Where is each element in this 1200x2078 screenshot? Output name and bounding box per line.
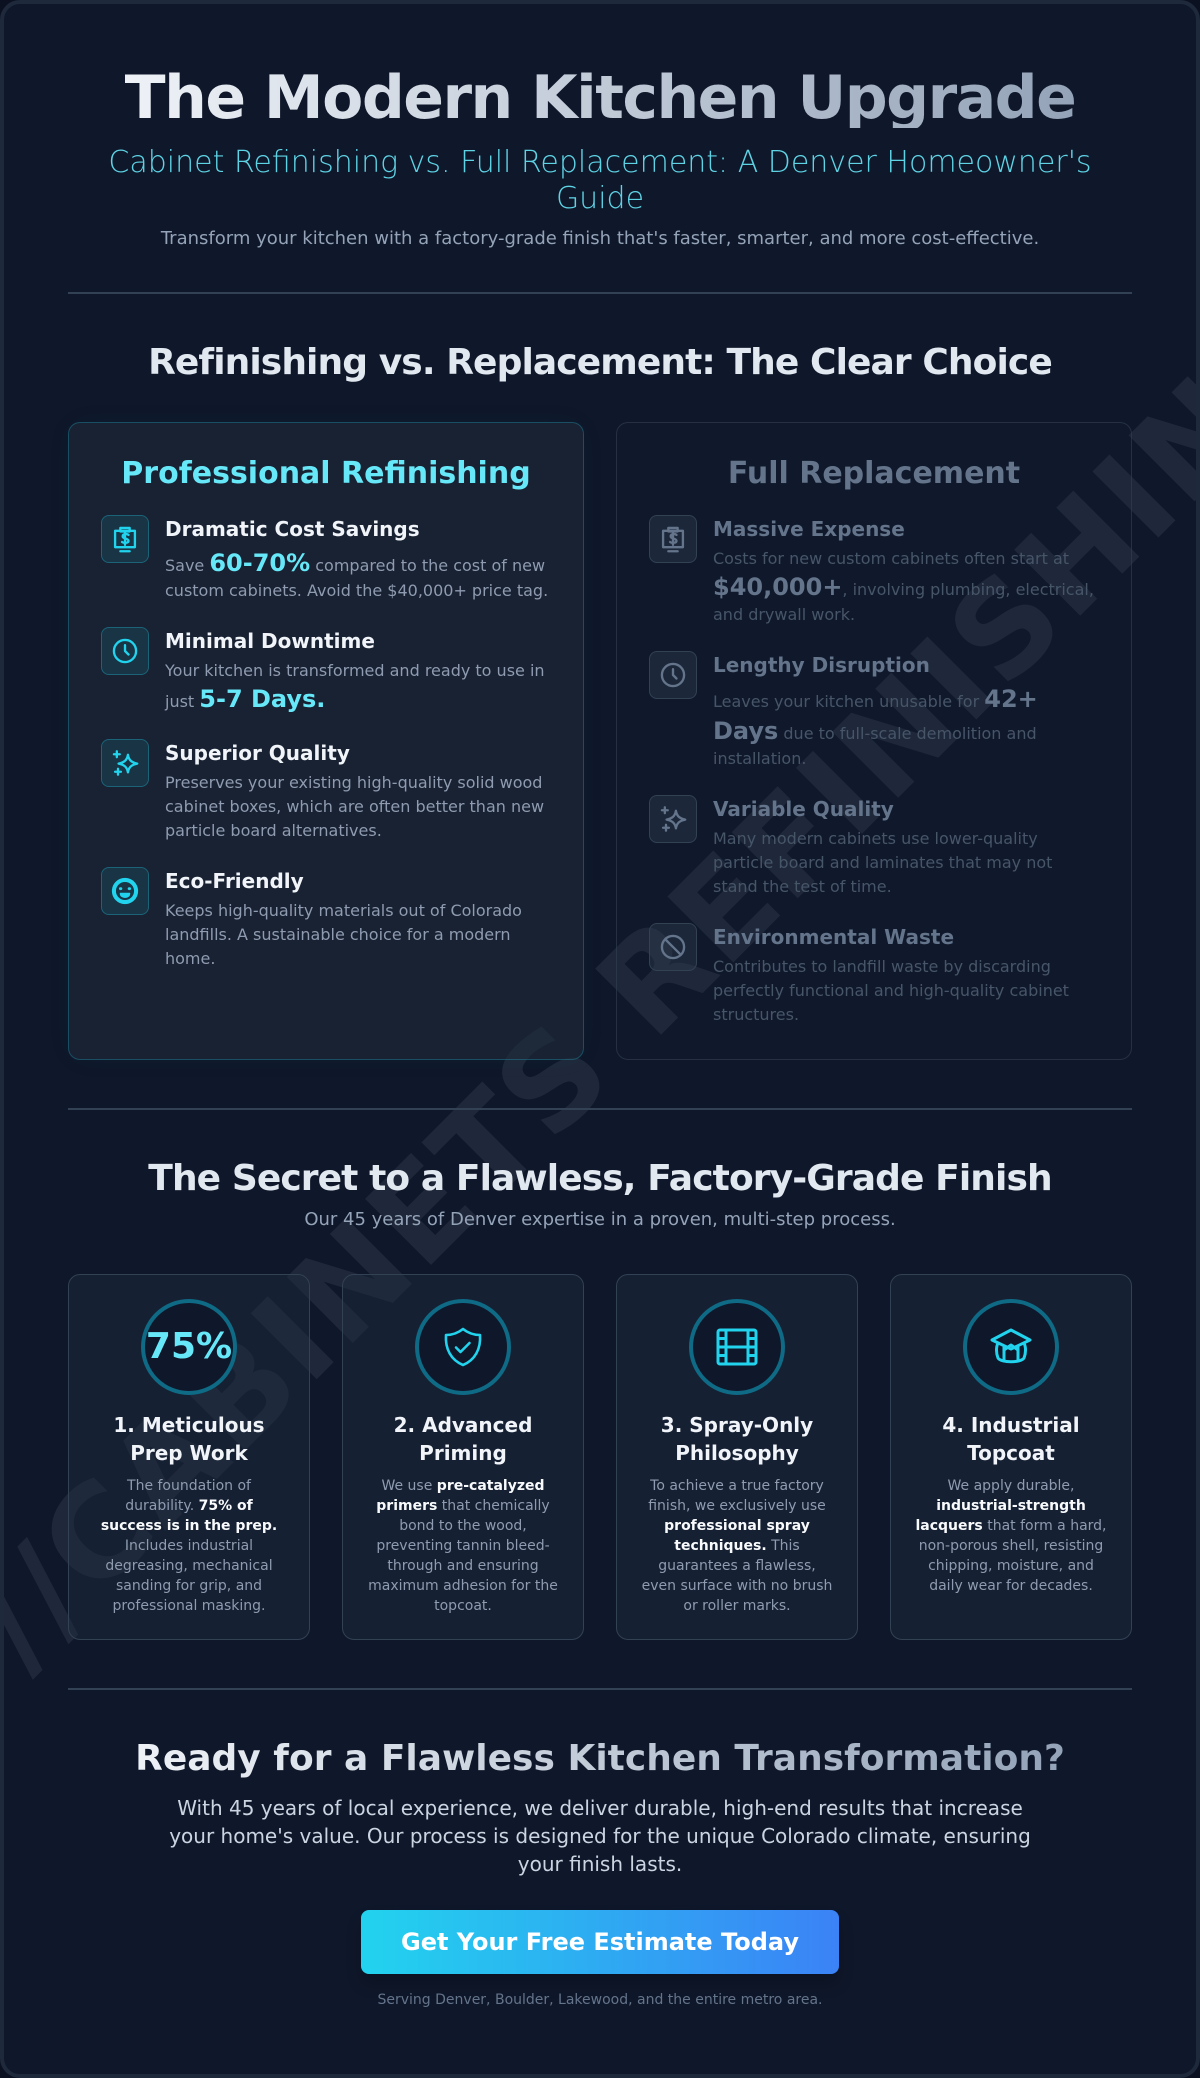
item text: Keeps high-quality materials out of Colorado landfills. A sustainable choice for a modern home. [165,901,522,968]
cta text: With 45 years of local experience, we deliver durable, high-end results that increase your home's value. Our process is designed for the unique Colorado climate, ensuring your finish lasts. [169,1796,1031,1876]
item text [713,797,1052,896]
icon: prohibited [649,923,697,971]
cta button [361,1910,839,1974]
comparison columns [68,422,1132,1060]
item: variable quality [649,795,1052,896]
comparison heading: Refinishing vs. Replacement: The Clear Choice [148,342,1052,383]
stat: 75%: 75% [146,1326,232,1367]
step 4 card [890,1274,1132,1640]
process heading: The Secret to a Flawless, Factory-Grade Finish [148,1158,1052,1199]
header [108,63,1092,249]
icon: clipboard dollar [101,515,149,563]
panel heading: Full Replacement [728,456,1020,491]
item text [713,925,1069,1024]
step title: 4. Industrial Topcoat [942,1413,1080,1465]
item text: Superior Quality [165,741,350,765]
step text: The foundation of durability. 75% of success is in the prep. Includes industrial degreasing, mechanical sanding for grip, and professional masking. [101,1478,277,1614]
icon: film strip [689,1299,785,1395]
subtitle: Cabinet Refinishing vs. Full Replacement: A Denver Homeowner's Guide [108,145,1092,216]
call to action [135,1738,1065,2008]
item text [165,517,548,600]
item text: Contributes to landfill waste by discarding perfectly functional and high-quality cabinet structures. [713,957,1069,1024]
item text: Eco-Friendly [165,869,304,893]
panel: professional refinishing [68,422,584,1060]
step 3 card [616,1274,858,1640]
item text: Massive Expense [713,517,905,541]
cta button: Get Your Free Estimate Today [401,1928,799,1956]
item: cost savings [101,515,548,600]
process intro: Our 45 years of Denver expertise in a proven, multi-step process. [304,1209,896,1230]
item: quality [101,739,544,840]
icon: smiling face [101,867,149,915]
stat: 75% [141,1299,237,1395]
tagline: Transform your kitchen with a factory-grade finish that's faster, smarter, and more cost-effective. [161,228,1039,249]
step title: 2. Advanced Priming [394,1413,532,1465]
item: downtime [101,627,545,713]
panel: full replacement [616,422,1132,1060]
item: expense [649,515,1094,624]
item text: Your kitchen is transformed and ready to use in just 5-7 Days. [165,661,545,713]
item text [165,869,522,968]
item text [164,629,545,713]
icon: graduation cap [963,1299,1059,1395]
item text: Variable Quality [713,797,894,821]
icon: clock [101,627,149,675]
item text: Lengthy Disruption [713,653,930,677]
item text [165,741,544,840]
icon: shield check [415,1299,511,1395]
item text: Dramatic Cost Savings [165,517,420,541]
step text: We apply durable, industrial-strength lacquers that form a hard, non-porous shell, resisting chipping, moisture, and daily wear for decades. [915,1478,1107,1594]
item text: Costs for new custom cabinets often start at $40,000+, involving plumbing, electrical, and drywall work. [713,549,1094,624]
item text: Save 60-70% compared to the cost of new custom cabinets. Avoid the $40,000+ price tag. [165,549,548,600]
icon: sparkles [649,795,697,843]
step title: 1. Meticulous Prep Work [113,1413,265,1465]
step 2 card [342,1274,584,1640]
panel heading: Professional Refinishing [121,456,531,491]
service area note: Serving Denver, Boulder, Lakewood, and the entire metro area. [378,1992,822,2008]
icon: clock [649,651,697,699]
item: waste [649,923,1069,1024]
item text: Preserves your existing high-quality solid wood cabinet boxes, which are often better than new particle board alternatives. [165,773,544,840]
step 1 card [68,1274,310,1640]
process steps [68,1274,1132,1640]
step text: To achieve a true factory finish, we exclusively use professional spray techniques. This guarantees a flawless, even surface with no brush or roller marks. [642,1478,832,1614]
icon: clipboard dollar [649,515,697,563]
item: eco [101,867,522,968]
item text: Minimal Downtime [165,629,375,653]
title: The Modern Kitchen Upgrade [125,63,1075,133]
step title: 3. Spray-Only Philosophy [661,1413,813,1465]
icon: sparkles [101,739,149,787]
item text: Environmental Waste [713,925,954,949]
item text: Many modern cabinets use lower-quality particle board and laminates that may not stand the test of time. [713,829,1052,896]
item text: Leaves your kitchen unusable for 42+ Days due to full-scale demolition and installation. [713,685,1038,768]
item: disruption [649,651,1038,768]
cta heading: Ready for a Flawless Kitchen Transformation? [135,1738,1065,1779]
step text: We use pre-catalyzed primers that chemically bond to the wood, preventing tannin bleed-through and ensuring maximum adhesion for the topcoat. [368,1478,558,1614]
